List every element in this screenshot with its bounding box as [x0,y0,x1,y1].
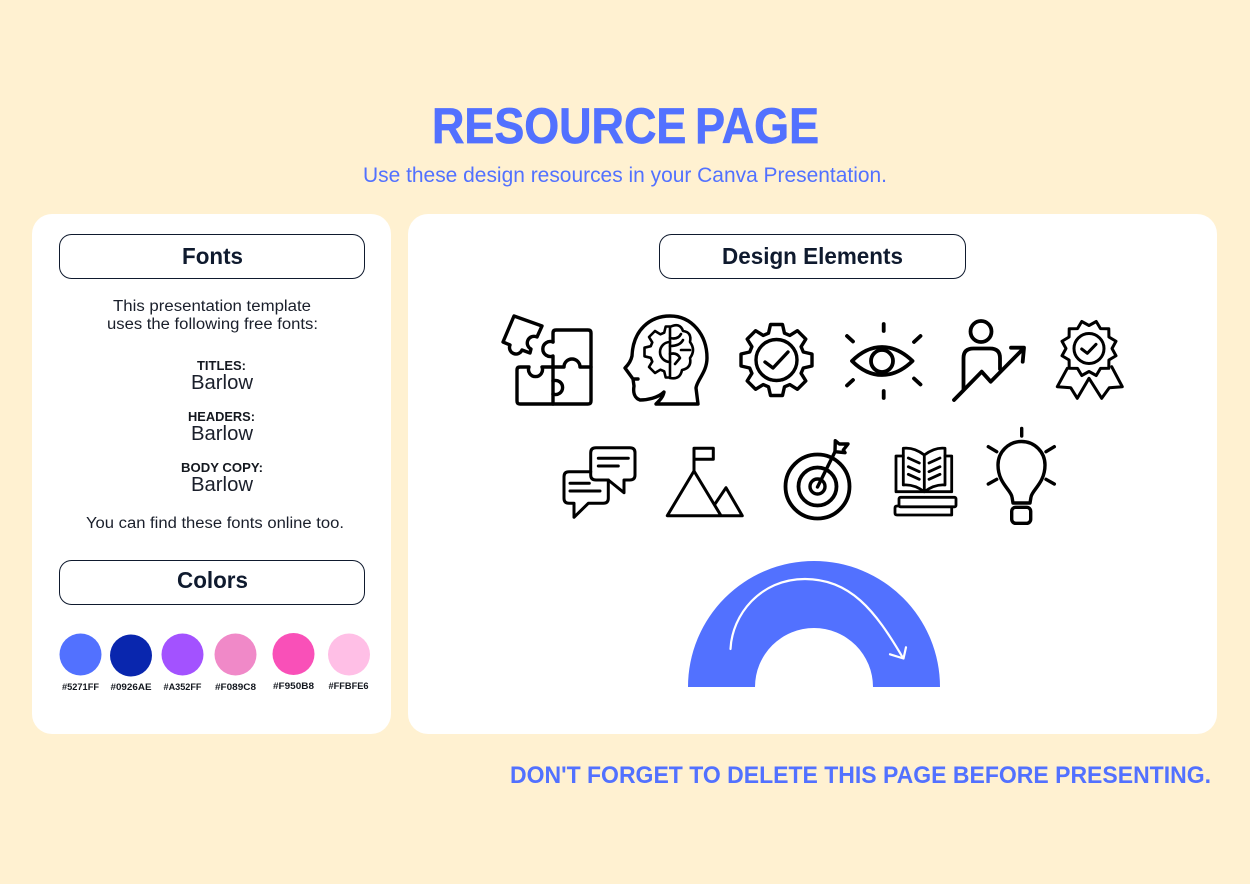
icon: open book on stacked books [895,448,956,515]
color swatch F950B8 [272,633,314,691]
icon: target with arrow [786,441,850,518]
subtitle: Use these design resources in your Canva Presentation. [363,164,887,187]
color swatch F089C8 [214,634,256,692]
color swatch FFBFE6: #FFBFE6 [328,681,368,691]
icon: mountain with flag [667,448,742,516]
color swatch 5271FF: #5271FF [62,682,100,692]
title: RESOURCE PAGE [432,98,819,154]
color swatch 0926AE [110,634,152,692]
text: body copy font: BODY COPY: [181,460,263,475]
footer note: DON'T FORGET TO DELETE THIS PAGE BEFORE PRESENTING. [510,762,1211,789]
icon: gear with check [741,324,812,396]
icon: light bulb [988,428,1054,523]
icon: person with growth arrow [954,321,1024,400]
color swatch 5271FF [60,634,102,692]
text: titles font [191,358,254,394]
color swatch F089C8: #F089C8 [215,682,256,692]
icon: head with brain and gear [625,316,707,404]
heading: design elements [660,234,966,278]
color swatch F950B8: #F950B8 [273,681,314,691]
color swatch 0926AE: #0926AE [110,682,152,692]
heading: fonts [60,234,364,278]
text: titles font: Barlow [191,372,254,394]
text: body copy font [181,460,263,496]
color swatch A352FF: #A352FF [164,682,202,692]
text: body copy font: Barlow [191,474,254,496]
heading: design elements: Design Elements [722,243,903,269]
icon: award ribbon [1057,322,1122,398]
text: headers font: HEADERS: [188,409,255,424]
color swatch A352FF [162,634,204,692]
heading: colors [60,560,364,604]
arc shape with arrow [688,561,940,687]
icon: eye with rays [847,324,920,398]
panel: fonts and colors [32,214,391,734]
panel: design elements [408,214,1217,734]
text: headers font: Barlow [191,423,254,445]
heading: colors: Colors [177,567,248,593]
arrow: white curved [730,579,906,658]
text: titles font: TITLES: [197,358,246,373]
color swatch FFBFE6 [328,634,370,691]
icon: chat bubbles [564,448,635,517]
text: fonts intro: uses the following free fonts: [107,316,318,333]
icon: puzzle [503,316,591,404]
heading: fonts: Fonts [182,243,243,269]
text: fonts intro [107,298,318,333]
text: fonts intro: This presentation template [113,298,311,315]
text: fonts note: You can find these fonts online too. [86,515,344,532]
text: headers font [188,409,255,445]
